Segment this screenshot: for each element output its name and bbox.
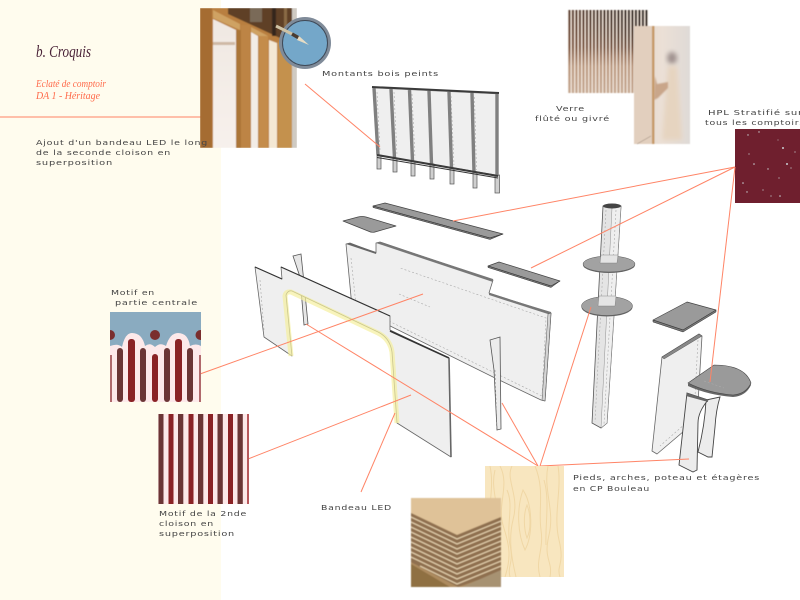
- label: bouleau: [573, 473, 760, 493]
- exploded: back partition: [346, 242, 551, 401]
- label: verre: Verre: [556, 104, 585, 113]
- image: frosted glass: [634, 26, 690, 144]
- label: motif 2nde cloison: [159, 509, 247, 538]
- label: motif central: Motif en: [111, 288, 155, 297]
- photo: painted wood posts: [200, 8, 297, 148]
- label: motif 2nde cloison: Motif de la 2nde: [159, 509, 247, 518]
- header rule: [0, 116, 201, 118]
- swatch: HPL laminate: [735, 129, 800, 203]
- exploded: long counter shelf: [373, 203, 503, 240]
- title: b. Croquis: [36, 42, 91, 61]
- label: motif central: [111, 288, 198, 307]
- label: bouleau: Pieds, arches, poteau et étagères: [573, 473, 760, 482]
- exploded: side panel: [652, 334, 702, 454]
- label: bouleau: en CP Bouleau: [573, 484, 650, 493]
- subtitle: Eclaté de comptoir: [35, 78, 107, 90]
- exploded: small leg right: [490, 337, 501, 430]
- intro text: Ajout d'un bandeau LED le long: [36, 138, 208, 147]
- label: motif central: partie centrale: [115, 298, 198, 307]
- image: plywood stack: [411, 498, 501, 587]
- icon: paint swatch with brush: [276, 17, 331, 69]
- label: motif 2nde cloison: superposition: [159, 529, 235, 538]
- frame dowels: [377, 92, 476, 170]
- exploded: small leg left: [293, 254, 308, 325]
- exploded: small top: [343, 216, 396, 232]
- pattern: second partition motif: [158, 414, 249, 504]
- exploded: rear curved leg: [698, 397, 720, 457]
- subtitle: DA 1 - Héritage: [35, 90, 100, 102]
- intro text: superposition: [36, 158, 113, 167]
- label: HPL: [705, 108, 800, 127]
- label: HPL: HPL Stratifié sur: [708, 108, 800, 117]
- intro text: de la seconde cloison en: [36, 148, 171, 157]
- exploded: column with round shelves: [582, 204, 635, 428]
- frame legs: [377, 155, 500, 193]
- frame studs: [374, 88, 497, 176]
- exploded: front curved leg: [679, 393, 708, 472]
- exploded: rectangular top: [653, 302, 716, 332]
- subtitle: [35, 78, 107, 102]
- label: verre: [535, 104, 610, 123]
- exploded: quarter round top: [688, 365, 751, 397]
- round shelf upper: [583, 255, 635, 273]
- leader lines: [200, 84, 735, 492]
- exploded: front arch panel: [255, 267, 451, 457]
- round shelf lower: [582, 296, 632, 316]
- label: verre: flûté ou givré: [535, 114, 610, 123]
- intro text: [36, 138, 208, 167]
- exploded: short counter shelf: [488, 262, 560, 288]
- exploded: stud frame: [372, 87, 500, 193]
- label: montants: Montants bois peints: [322, 69, 439, 78]
- frame rails: [372, 87, 499, 176]
- label: HPL: tous les comptoirs: [705, 118, 800, 127]
- cream side panel: [0, 0, 221, 600]
- label: bandeau LED: Bandeau LED: [321, 503, 392, 512]
- pattern: central motif: [105, 312, 206, 402]
- LED strip: [285, 292, 397, 423]
- image: birch veneer: [485, 466, 564, 577]
- label: motif 2nde cloison: cloison en: [159, 519, 214, 528]
- image: fluted glass: [568, 10, 648, 93]
